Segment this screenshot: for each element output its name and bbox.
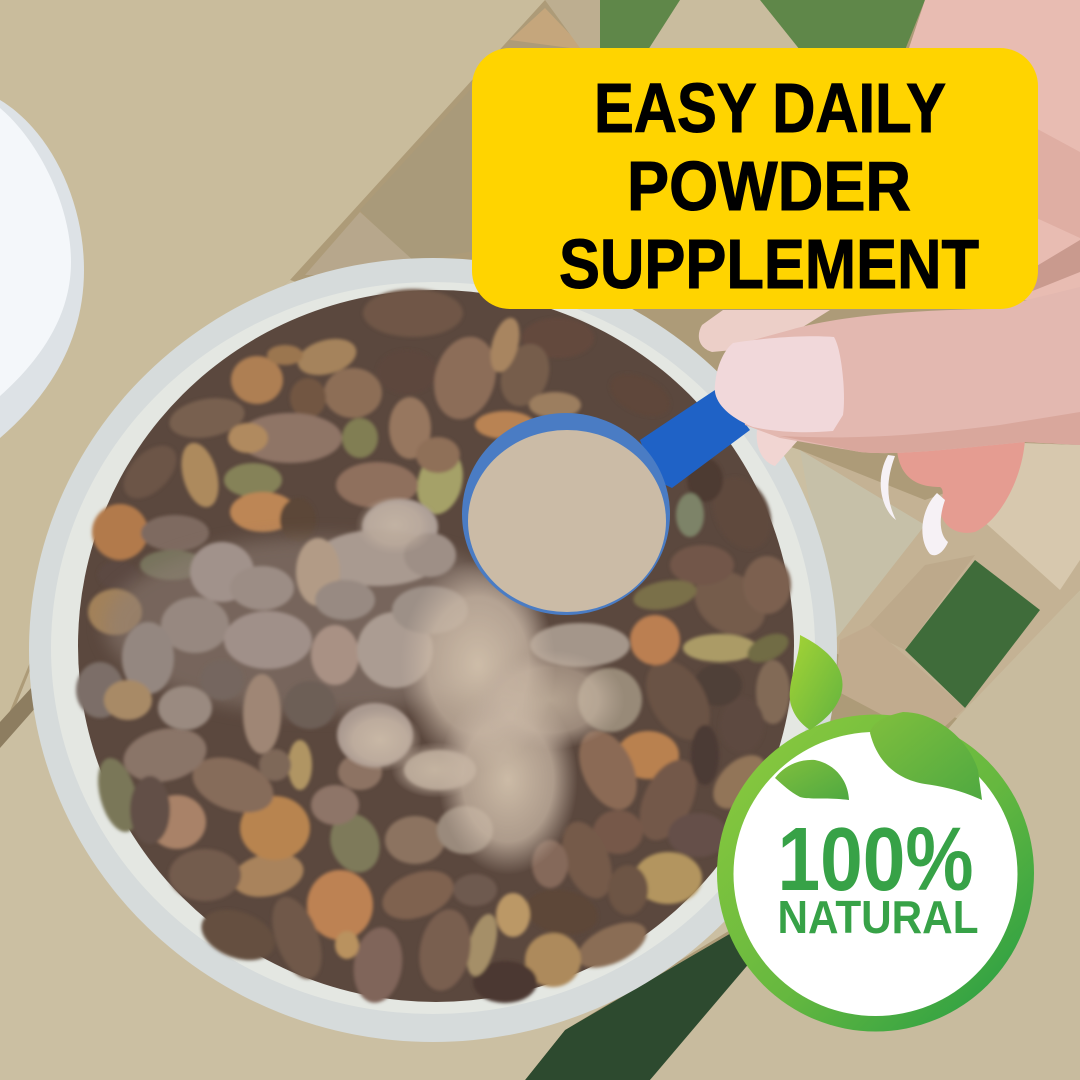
badge label: NATURAL <box>778 891 978 943</box>
white bowl <box>29 258 837 1042</box>
cat food kibbles <box>88 289 793 1006</box>
food mass <box>78 290 794 1002</box>
thumb nail <box>715 336 844 432</box>
thumb shade <box>780 412 1080 453</box>
title banner: EASY DAILY <box>594 69 946 147</box>
fingernail lower <box>757 430 800 466</box>
scoop powder <box>468 430 666 612</box>
plank edge shadow <box>0 640 82 748</box>
white lid at left edge <box>0 100 84 438</box>
upper fingers behind banner <box>905 0 1080 300</box>
icon: right leaf <box>870 712 982 800</box>
powder dusted kibble <box>76 495 642 875</box>
plank: upper left <box>0 0 545 735</box>
title banner <box>472 48 1038 309</box>
icon: left leaf <box>775 760 849 800</box>
lower finger <box>897 440 1025 533</box>
title banner: SUPPLEMENT <box>559 225 979 303</box>
100% natural badge <box>717 635 1034 1032</box>
plank: lower left <box>0 280 835 1080</box>
hand <box>699 0 1080 555</box>
icon: top leaf <box>790 635 843 730</box>
badge number: 100% <box>778 810 974 910</box>
blue measuring scoop <box>462 388 750 615</box>
white nails <box>881 455 896 520</box>
plank: lower right <box>650 590 1080 1080</box>
thumb <box>735 287 1080 453</box>
title banner: POWDER <box>627 147 911 225</box>
index finger <box>699 310 830 352</box>
